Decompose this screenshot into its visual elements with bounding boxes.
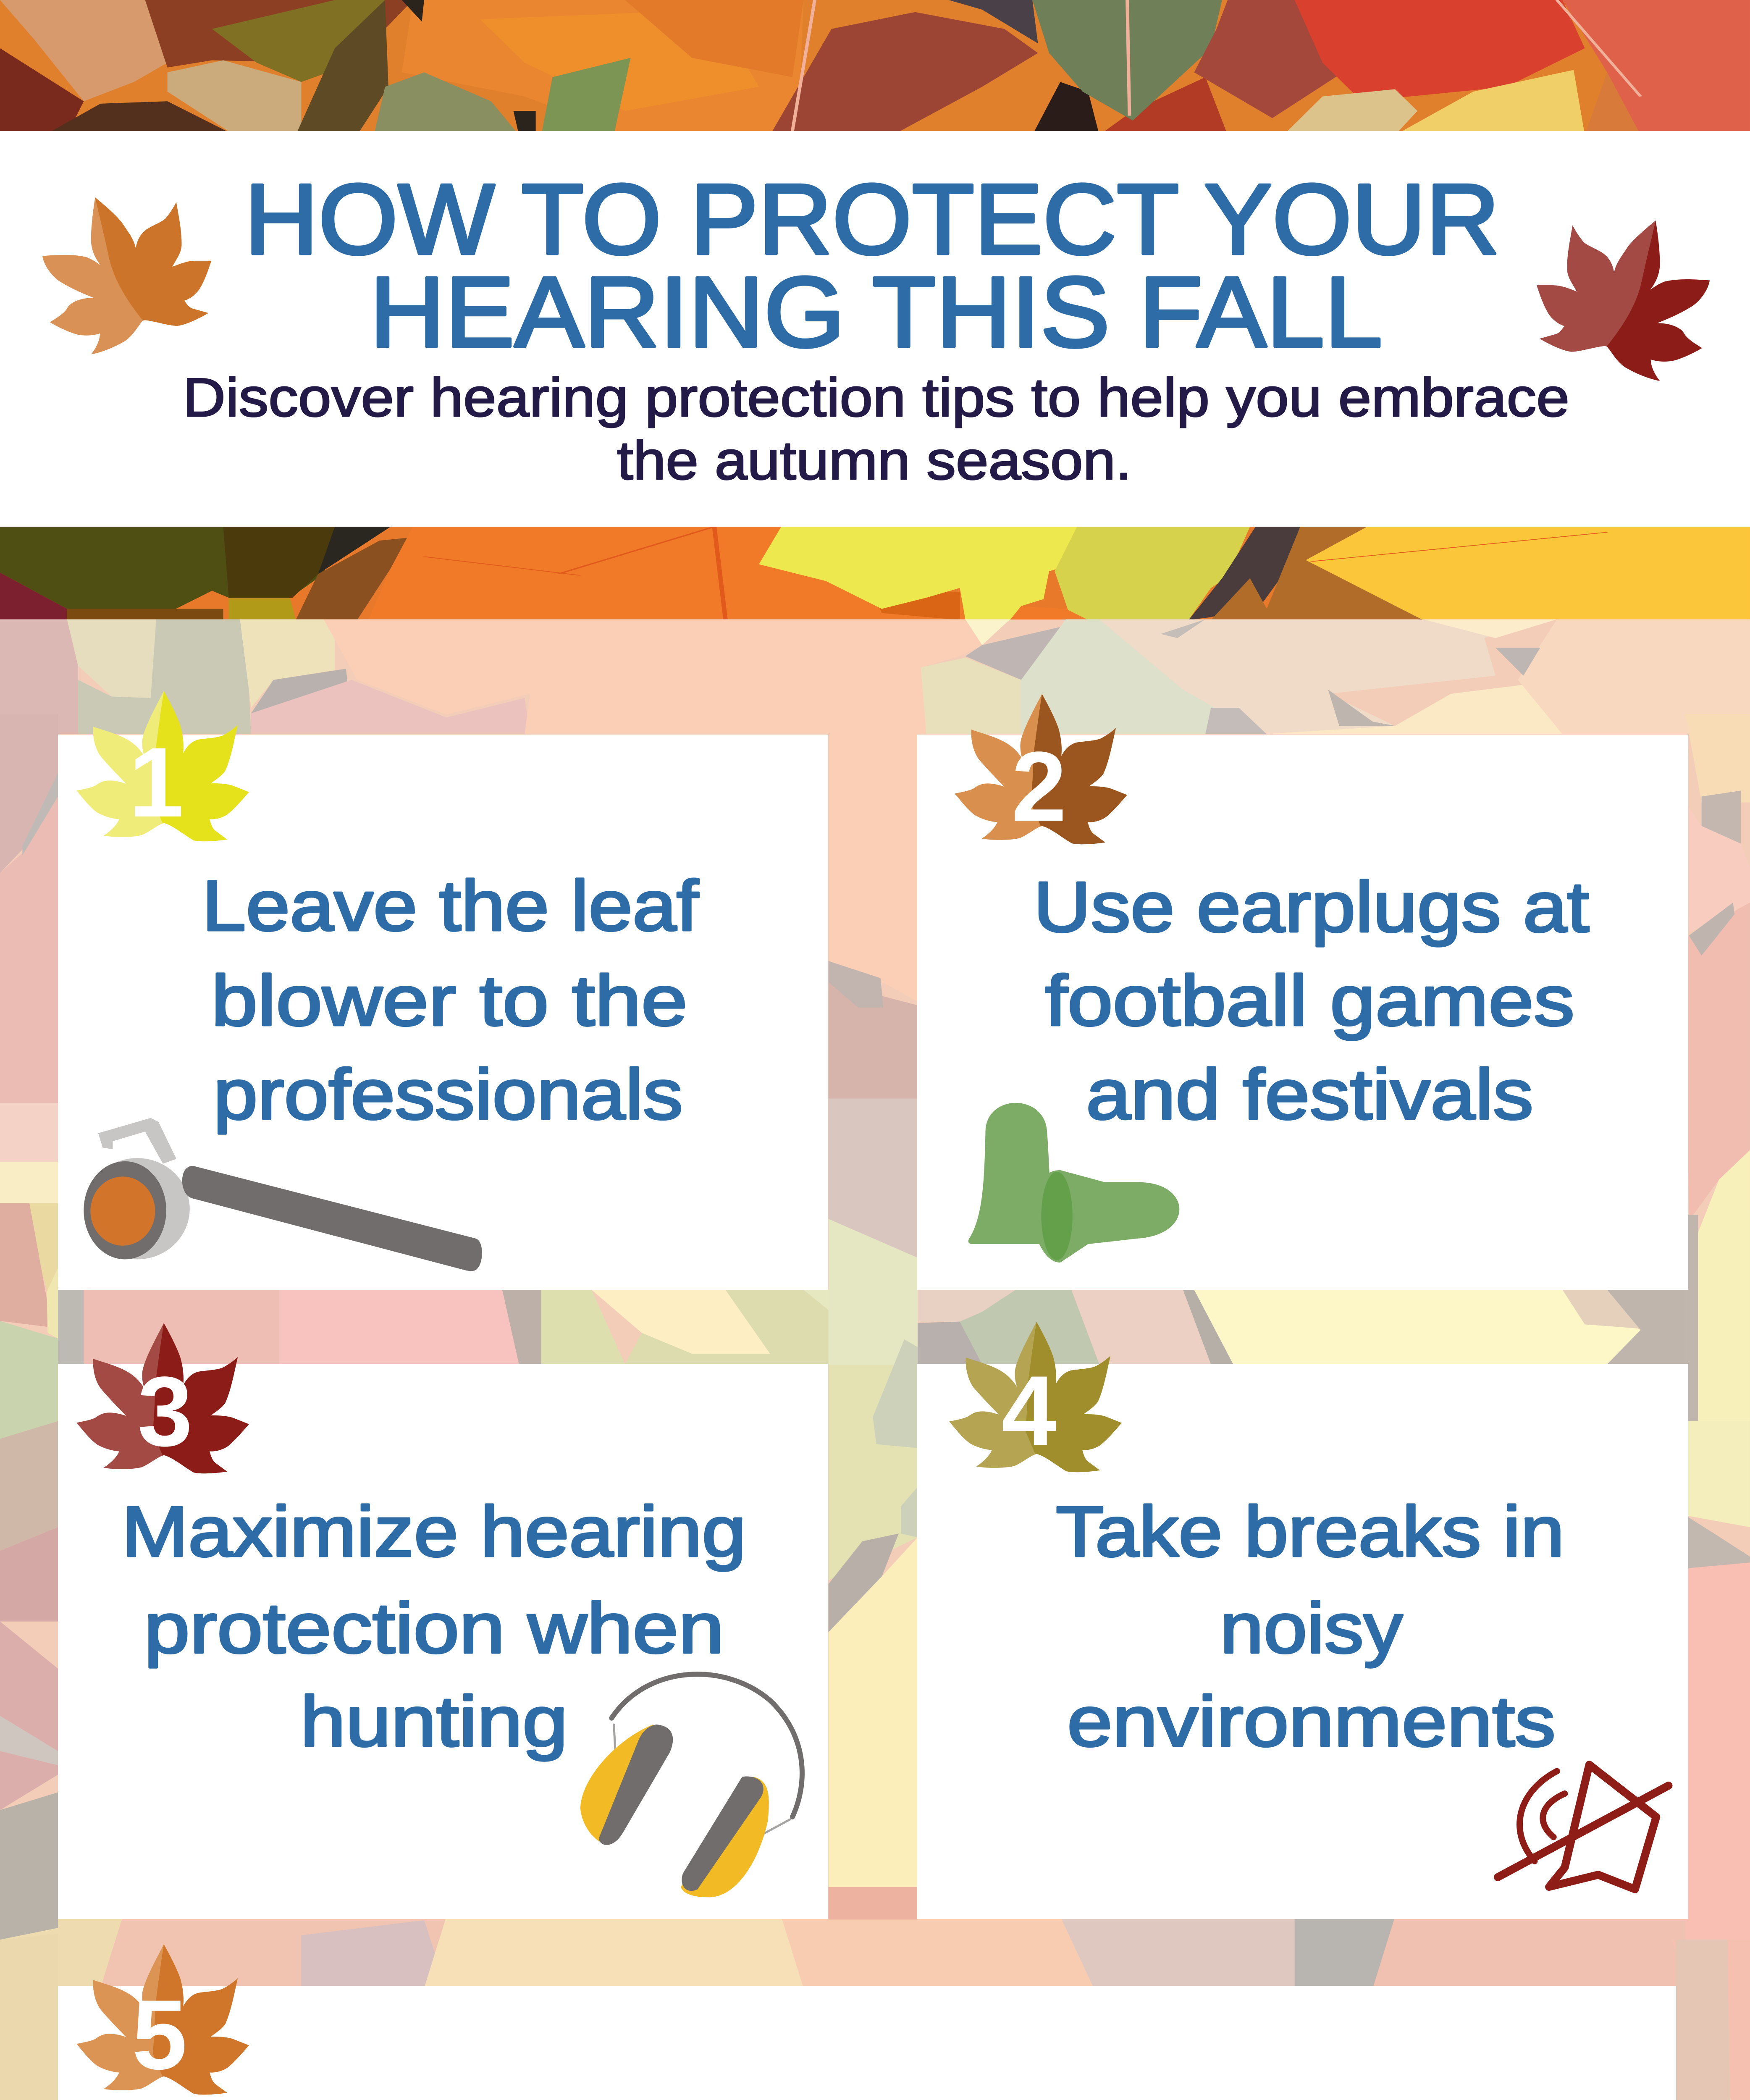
tip 1 text: professionals: [213, 1055, 683, 1134]
panel: tip 5 talk to your audiologist: [58, 1941, 1676, 2100]
faded left column: [0, 714, 58, 2100]
panel: tip 2 earplugs: [917, 691, 1688, 1290]
background strip: top leaves: [0, 0, 1750, 135]
faded centre column: [829, 733, 918, 1919]
faded band above tip cards: [0, 620, 1750, 734]
tip 1 text: blower to the: [211, 961, 687, 1041]
tip 2 text: and festivals: [1086, 1055, 1533, 1134]
panel: tip 3 hearing protection when hunting: [58, 1320, 828, 1919]
icon: red title leaf: [1530, 215, 1710, 381]
badge: leaf number 2: 2: [1011, 731, 1067, 842]
translucent white panel over the leaves: [0, 620, 1750, 2100]
tip 1 text: [202, 866, 699, 1134]
icon: leaf blower: [84, 1118, 482, 1271]
faded right column: [1671, 714, 1750, 2100]
badge: leaf number 3: [76, 1320, 254, 1481]
tip 2 text: [1034, 867, 1589, 1134]
tip 3 text: protection when: [144, 1588, 724, 1668]
tip 3 text: [122, 1492, 746, 1761]
tip 4 text: Take breaks in: [1056, 1492, 1564, 1572]
header panel: [0, 131, 1750, 527]
tip 2 text: Use earplugs at: [1034, 867, 1589, 947]
tip 4 text: noisy: [1220, 1588, 1403, 1668]
tip 4 text: environments: [1067, 1682, 1556, 1761]
badge: leaf number 1: [76, 688, 254, 849]
badge: leaf number 5: [76, 1941, 254, 2100]
panel: tip 4 take breaks: [917, 1319, 1688, 1919]
badge: leaf number 4: [949, 1319, 1127, 1480]
badge: leaf number 3: 3: [137, 1356, 193, 1467]
badge: leaf number 4: 4: [1001, 1355, 1057, 1466]
tip 2 text: football games: [1045, 961, 1574, 1041]
tip 4 text: [1056, 1492, 1564, 1761]
tip 3 text: Maximize hearing: [122, 1492, 746, 1572]
subtitle: [183, 367, 1569, 491]
icon: muted speaker: [1498, 1765, 1669, 1889]
icon: earplugs: [968, 1103, 1179, 1263]
panel: tip 1 leaf blower: [58, 688, 828, 1290]
title: [244, 164, 1500, 368]
icon: orange title leaf: [42, 192, 218, 354]
background strip: second band of leaves: [0, 527, 1750, 620]
badge: leaf number 1: 1: [129, 727, 184, 838]
tip 3 text: hunting: [300, 1682, 568, 1761]
tip 1 text: Leave the leaf: [202, 866, 699, 946]
title: HOW TO PROTECT YOUR: [244, 164, 1500, 275]
icon: ear muffs: [580, 1674, 802, 1897]
badge: leaf number 5: 5: [132, 1979, 187, 2090]
title: HEARING THIS FALL: [370, 257, 1383, 368]
badge: leaf number 2: [955, 691, 1132, 852]
subtitle: the autumn season.: [617, 430, 1132, 491]
subtitle: Discover hearing protection tips to help you embrace: [183, 367, 1569, 428]
faded band between card rows: [56, 1290, 1689, 1364]
faded bands around card five: [0, 1916, 1750, 2100]
